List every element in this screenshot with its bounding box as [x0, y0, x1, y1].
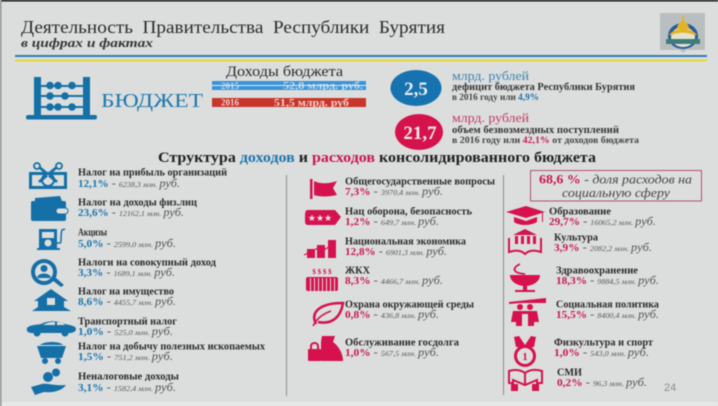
icon: leaf: [313, 303, 343, 326]
callout: grants: объем безвозмездных поступлений: [452, 125, 619, 136]
icon: house: [32, 289, 71, 311]
revenue item: profit tax: Налог на прибыль организаций: [78, 168, 227, 178]
callout: grants: [395, 111, 640, 150]
icon: medal: 1: [522, 351, 528, 363]
icon: money bag and lock: [308, 336, 343, 361]
social item: media: 0,2% - 96,3 млн. руб.: [557, 377, 647, 389]
social item: media: [509, 368, 647, 391]
icon: wallet: [31, 196, 68, 221]
panel: expenditures list: [304, 176, 495, 361]
expense item: defence and security: Нац оборона, безопасность: [345, 206, 472, 218]
revenue item: profit tax: [29, 163, 227, 190]
expense item: public debt service: 1,0% - 567,5 млн. руб.: [345, 347, 439, 359]
icon: stars ticket: [305, 210, 341, 225]
icon: bar chart with arrow: [304, 240, 336, 258]
revenue item: property tax: [32, 286, 176, 311]
revenue item: non-tax income: [31, 368, 179, 395]
expense item: general state issues: [310, 176, 495, 199]
revenue item: non-tax income: 3,1% - 1582,4 млн. руб.: [78, 382, 176, 394]
expense item: general state issues: 7,3% - 3970,4 млн. руб.: [345, 186, 443, 198]
revenue item: property tax: 8,6% - 4455,7 млн. руб.: [78, 296, 176, 308]
heading: revenues: Доходы бюджета: [226, 64, 344, 80]
revenue item: mineral extraction tax: Налог на добычу полезных ископаемых: [78, 342, 266, 352]
icon: abacus: [26, 77, 97, 120]
expense item: national economy: [304, 236, 467, 258]
icon: car: [27, 321, 76, 336]
social item: sport: 1,0% - 543,0 млн. руб.: [554, 347, 649, 359]
panel: revenues list: [27, 163, 266, 395]
bar: 2016: 51,5 млрд. руб: [274, 98, 349, 109]
revenue item: aggregate income tax: [33, 258, 217, 287]
revenue item: excise: Акцизы: [78, 228, 107, 238]
expense item: housing and utilities: 8,3% - 4466,7 млн. руб.: [345, 275, 443, 287]
expense item: public debt service: Обслуживание госдолга: [345, 338, 460, 348]
social item: media: СМИ: [557, 368, 582, 378]
expense item: defence and security: [305, 206, 472, 228]
revenue item: personal income tax: [31, 196, 197, 221]
callout: social share: [530, 170, 702, 201]
revenue item: transport tax: [27, 316, 177, 338]
heading: structure: Структура доходов и расходов консолидированного бюджета: [158, 150, 597, 166]
expense item: housing and utilities: [306, 266, 443, 291]
revenue item: property tax: Налог на имущество: [78, 286, 174, 298]
expense item: national economy: 12,8% - 6901,3 млн. руб.: [345, 246, 447, 258]
callout: social share: 68,6 % - доля расходов на: [539, 172, 692, 186]
icon: fuel pump: [37, 229, 65, 250]
bar: 2015: 52,8 млрд. руб.: [283, 81, 364, 92]
social item: sport: [514, 336, 654, 366]
revenue item: personal income tax: Налог на доходы физ.лиц: [78, 198, 197, 208]
icon: flag: [310, 179, 337, 199]
icon: museum on book: [509, 229, 541, 254]
social item: healthcare: Здравоохранение: [556, 266, 638, 276]
callout: grants: млрд. рублей: [452, 111, 529, 125]
icon: mine cart: [37, 342, 66, 364]
revenue item: transport tax: Транспортный налог: [78, 316, 177, 328]
icon: stars ticket: ★★★: [308, 214, 332, 224]
social item: healthcare: 18,3% - 9884,5 млн. руб.: [556, 275, 659, 287]
icon: bowl of hygieia: [510, 264, 540, 292]
social item: social policy: 15,5% - 8400,4 млн. руб.: [556, 309, 659, 321]
bar: 2015: [212, 81, 366, 92]
revenue item: excise: 5,0% - 2599,0 млн. руб.: [78, 238, 176, 250]
callout: deficit: млрд. рублей: [452, 69, 529, 83]
revenue item: mineral extraction tax: [37, 342, 266, 364]
icon: hand with coins: [31, 368, 66, 395]
revenue item: profit tax: 12,1% - 6238,3 млн. руб.: [78, 178, 180, 190]
social item: social policy: Социальная политика: [556, 300, 660, 310]
revenue item: aggregate income tax: Налоги на совокупный доход: [78, 258, 217, 268]
panel: budget revenues: [212, 64, 366, 109]
social item: education: 29,7% - 16065,2 млн. руб.: [549, 216, 656, 228]
expense item: defence and security: 1,2% - 649,7 млн. руб.: [345, 216, 439, 228]
social item: sport: Физкультура и спорт: [554, 338, 654, 348]
subtitle: в цифрах и фактах: [21, 35, 154, 50]
icon: graduation cap: [506, 206, 545, 225]
expense item: national economy: Национальная экономика: [345, 236, 467, 248]
bar: 2016: [212, 98, 366, 109]
social item: culture: Культура: [554, 232, 599, 244]
revenue item: aggregate income tax: 3,3% - 1689,1 млн. руб.: [78, 267, 175, 279]
expense item: environment: Охрана окружающей среды: [345, 300, 474, 310]
revenue item: excise: [37, 228, 176, 250]
icon: family under roof: [509, 298, 546, 326]
icon: money with scissors: [29, 163, 67, 189]
panel: social expenditures: [506, 206, 660, 391]
expense item: general state issues: Общегосударственные вопросы: [345, 176, 495, 188]
callout: deficit: в 2016 году или 4,9%: [452, 92, 539, 102]
expense item: housing and utilities: ЖКХ: [345, 266, 370, 276]
callout: social share: социальную сферу: [562, 186, 671, 200]
social item: healthcare: [510, 264, 659, 292]
callout: deficit: [390, 69, 636, 106]
icon: magnifier with person: [33, 261, 64, 287]
callout: grants: 21,7: [403, 123, 437, 144]
bar: 2015: 2015: [221, 81, 240, 91]
icon: open book: [509, 370, 542, 391]
bar: 2016: 2016: [221, 98, 240, 108]
page number: 24: [664, 382, 676, 394]
social item: social policy: [509, 298, 660, 326]
expense item: environment: [313, 300, 474, 326]
revenue item: mineral extraction tax: 1,5% - 751,2 млн. руб.: [78, 351, 173, 363]
icon: radiator: $ $ $ $: [312, 268, 332, 276]
social item: education: Образование: [549, 206, 611, 218]
title: Деятельность Правительства Республики Бурятия: [21, 17, 445, 37]
social item: culture: [509, 229, 652, 254]
expense item: public debt service: [308, 336, 460, 361]
callout: grants: в 2016 году или 42,1% от доходов бюджета: [452, 135, 640, 145]
revenue item: personal income tax: 23,6% - 12162,1 млн. руб.: [78, 207, 184, 219]
expense item: environment: 0,8% - 436,8 млн. руб.: [345, 309, 439, 321]
social item: education: [506, 206, 656, 228]
callout: deficit: дефицит бюджета Республики Бурятия: [452, 82, 636, 93]
revenue item: transport tax: 1,0% - 525,0 млн. руб.: [78, 326, 173, 338]
social item: culture: 3,9% - 2082,2 млн. руб.: [554, 242, 652, 254]
label: budget: БЮДЖЕТ: [101, 90, 203, 112]
emblem: [660, 13, 705, 53]
revenue item: non-tax income: Неналоговые доходы: [78, 372, 179, 382]
callout: deficit: 2,5: [404, 79, 428, 100]
